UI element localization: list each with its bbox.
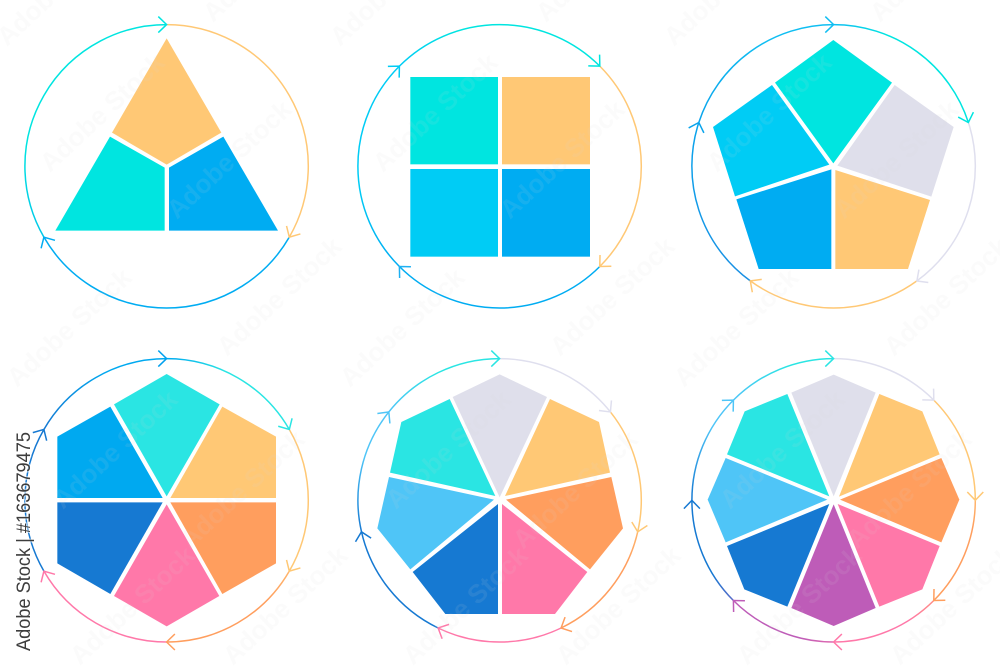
watermark pattern: Adobe Stock <box>701 47 838 177</box>
watermark pattern: Adobe Stock <box>380 384 517 514</box>
circular arrows: seven steps <box>354 351 647 642</box>
circular arrows: three steps <box>25 17 308 308</box>
watermark pattern: Adobe Stock <box>217 540 354 667</box>
watermark pattern: Adobe Stock <box>828 94 965 224</box>
panel: heptagon in seven segments <box>354 351 647 642</box>
watermark pattern: Adobe Stock <box>34 47 171 177</box>
watermark pattern: Adobe Stock <box>367 47 504 177</box>
vertical stock id label: Adobe Stock | #163679475 <box>14 432 35 651</box>
circular arrows: eight steps <box>684 351 983 650</box>
panel: triangle in three segments <box>25 17 308 308</box>
watermark pattern: Adobe Stock <box>550 540 687 667</box>
watermark pattern: Adobe Stock <box>397 540 534 667</box>
watermark pattern: Adobe Stock <box>507 424 644 554</box>
watermark pattern: Adobe Stock <box>714 384 851 514</box>
watermark pattern: Adobe Stock <box>731 540 868 667</box>
watermark pattern: Adobe Stock <box>544 231 681 361</box>
square segments <box>410 77 590 257</box>
watermark pattern: Adobe Stock <box>334 262 471 392</box>
hexagon segments <box>57 374 276 626</box>
watermark pattern: Adobe Stock <box>1 262 138 392</box>
pentagon segments <box>713 40 954 269</box>
watermark pattern: Adobe Stock <box>161 94 298 224</box>
panel: pentagon in five segments <box>689 17 976 308</box>
watermark pattern: Adobe Stock <box>174 424 311 554</box>
watermark pattern: Adobe Stock <box>668 262 805 392</box>
circular arrows: four steps <box>358 25 641 308</box>
watermark pattern: Adobe Stock <box>494 94 631 224</box>
panel: hexagon in six segments <box>25 351 308 650</box>
watermark pattern: Adobe Stock <box>64 540 201 667</box>
watermark pattern: Adobe Stock <box>211 231 348 361</box>
circular arrows: five steps <box>689 17 976 308</box>
triangle segments <box>55 38 278 231</box>
panel: square in four segments <box>358 25 641 308</box>
heptagon segments <box>377 374 623 614</box>
watermark pattern: Adobe Stock <box>47 384 184 514</box>
watermark pattern: Adobe Stock <box>841 424 978 554</box>
octagon segments <box>708 375 959 626</box>
circular arrows: six steps <box>25 351 308 650</box>
panel: octagon in eight segments <box>684 351 983 650</box>
